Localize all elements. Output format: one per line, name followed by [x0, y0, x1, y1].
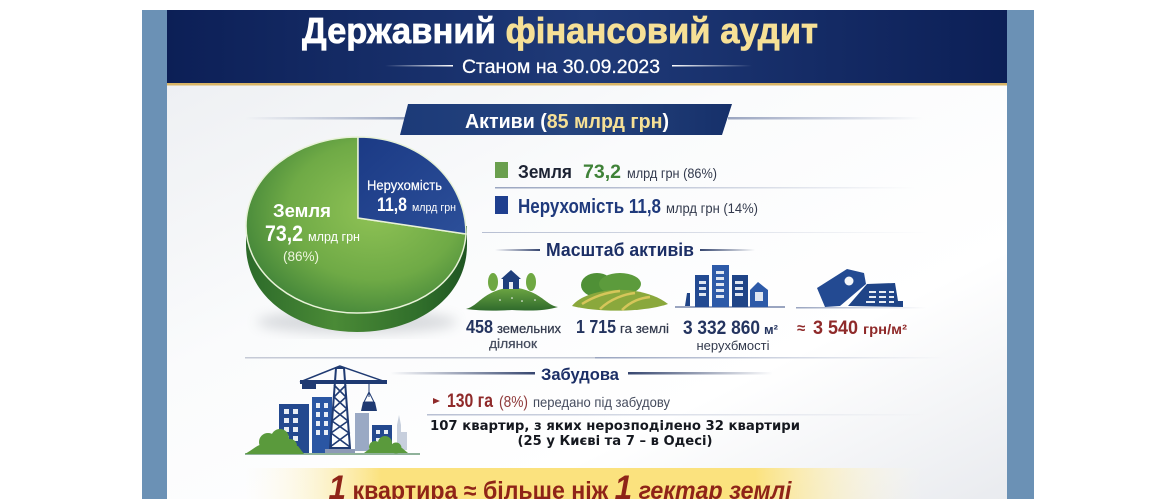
text: area transferred	[433, 391, 670, 412]
title: Державний фінансовий аудит	[302, 10, 818, 51]
text: price per square metre: ≈	[797, 320, 805, 337]
legend: real estate: млрд грн (14%)	[666, 201, 758, 216]
text: field: 1 715	[576, 317, 616, 337]
heading: asset scale: Масштаб активів	[546, 240, 694, 260]
label: land: млрд грн	[308, 230, 360, 244]
text: apartments	[430, 418, 800, 449]
label: real estate	[367, 177, 456, 216]
text: area transferred: 130 га	[447, 391, 493, 412]
text: field: га землі	[620, 321, 669, 336]
label: land: 73,2	[265, 221, 303, 246]
illustration: crane and buildings	[245, 366, 420, 455]
bushes	[245, 429, 408, 454]
text: apartments: (25 у Києві та 7 – в Одесі)	[518, 433, 712, 449]
text: floor area	[683, 317, 779, 353]
label: land: Земля	[273, 201, 331, 221]
page frame	[142, 10, 1034, 499]
legend: land: Земля	[518, 162, 572, 182]
icon: land plots	[466, 270, 558, 311]
text: land plots: ділянок	[489, 336, 537, 351]
label: real estate: млрд грн	[412, 202, 456, 214]
text: floor area: 3 332 860	[683, 317, 760, 339]
text: price per square metre: грн/м²	[863, 321, 907, 337]
text: land plots: земельних	[497, 321, 561, 336]
label: real estate: 11,8	[377, 194, 407, 216]
pie chart	[246, 137, 467, 334]
section header: assets	[245, 104, 923, 135]
header band	[167, 10, 1007, 86]
text: price per square metre: 3 540	[813, 317, 858, 339]
text: area transferred: передано під забудову	[533, 394, 670, 410]
subtitle: Станом на 30.09.2023	[462, 57, 660, 78]
section header: assets: Активи (85 млрд грн)	[465, 111, 669, 133]
heading: development: Забудова	[541, 366, 620, 384]
legend: real estate	[495, 196, 758, 218]
text: apartments: 107 квартир, з яких нерозподілено 32 квартири	[430, 418, 800, 434]
buildings	[279, 397, 407, 453]
text: area transferred: (8%)	[499, 394, 528, 411]
text: floor area: м²	[764, 322, 779, 337]
text: land plots: 458	[466, 317, 493, 337]
legend	[482, 161, 932, 233]
legend: land	[495, 161, 717, 183]
icon: buildings	[675, 265, 785, 308]
callout: comparison	[245, 468, 925, 499]
legend: land: 73,2	[583, 161, 621, 183]
text: floor area: нерухбмості	[696, 338, 770, 353]
crane	[300, 366, 387, 453]
legend: real estate: Нерухомість 11,8	[518, 196, 661, 218]
text: field	[576, 317, 669, 337]
label: land	[265, 201, 360, 264]
icon: field	[572, 273, 668, 311]
text: land plots	[466, 317, 561, 351]
label: land: (86%)	[283, 249, 319, 264]
legend: land: млрд грн (86%)	[627, 166, 717, 181]
icon: price tag	[796, 269, 926, 308]
label: real estate: Нерухомість	[367, 177, 442, 193]
panel: content	[167, 84, 1007, 499]
text: price per square metre	[797, 317, 907, 339]
